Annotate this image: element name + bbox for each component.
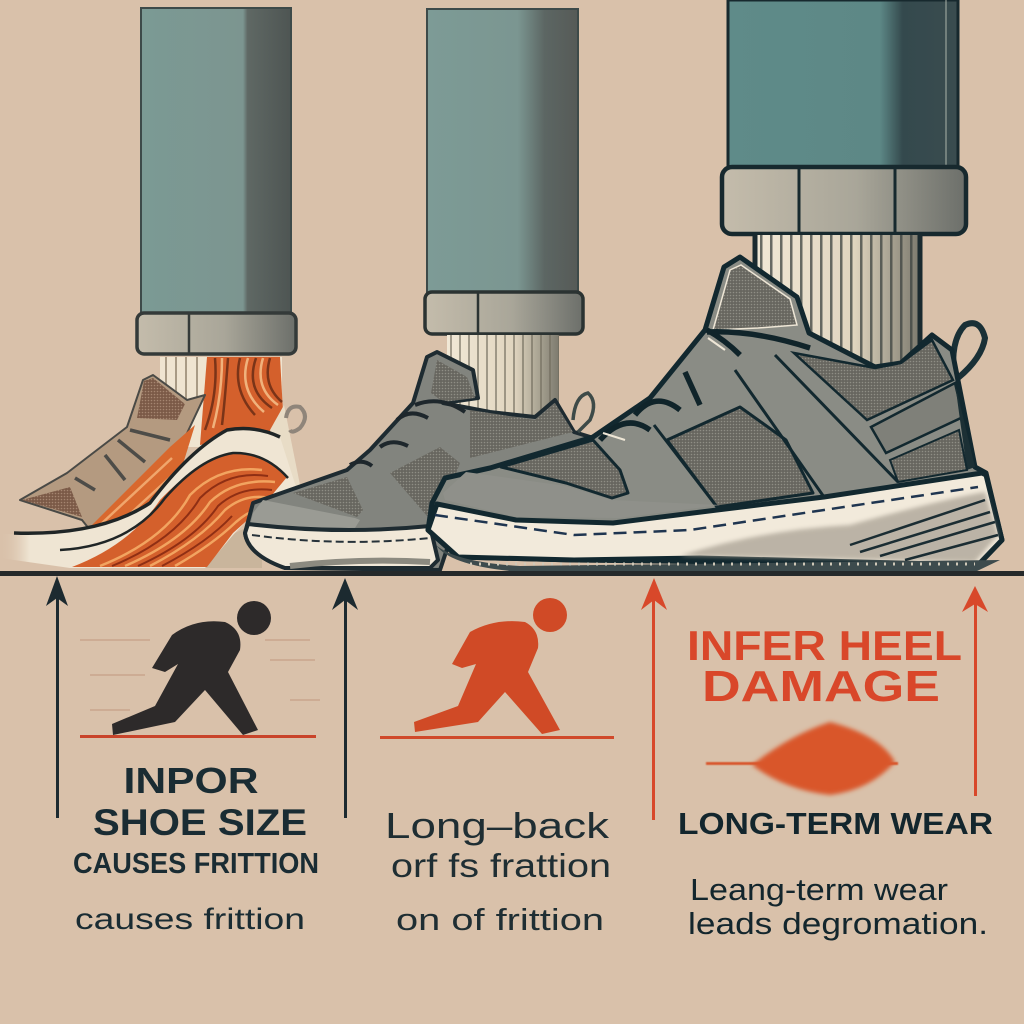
heading: inner heel damage: INFER HEEL [687, 622, 962, 669]
arrow: left inner [332, 578, 358, 818]
laces [600, 330, 810, 440]
text: left column: INPOR [124, 760, 258, 801]
middle mesh [667, 407, 813, 507]
text: right column [678, 806, 993, 941]
text: middle column: Long–back [385, 805, 610, 846]
motion lines [80, 640, 320, 710]
icon: orange running figure [414, 598, 567, 734]
tan ground patch behind sole [205, 520, 262, 568]
toe mesh [501, 440, 628, 498]
heel mesh [890, 430, 967, 482]
ground line [0, 571, 1024, 576]
text: middle column: orf fs frattion [391, 847, 611, 884]
arrow: left outer [46, 576, 68, 818]
arrow: middle right [641, 578, 667, 820]
shoe upper [20, 375, 205, 530]
white swoosh bands [0, 429, 297, 568]
left foot: inflamed shoe with friction lines [0, 357, 305, 568]
text: right column: LONG-TERM WEAR [678, 806, 993, 841]
text: left column [73, 760, 319, 936]
heel strip [871, 383, 963, 453]
sock with friction [160, 357, 284, 447]
divider line: orange figure [380, 736, 614, 739]
toe cap [443, 472, 720, 518]
tongue mesh [713, 265, 797, 330]
divider line: dark figure [80, 735, 316, 738]
right shoe [428, 257, 1002, 572]
left leg: trouser and cuff [137, 8, 296, 354]
text: middle column: on of frittion [396, 902, 604, 937]
text: left column: causes frittion [75, 903, 305, 936]
heel pull loop [953, 323, 985, 378]
middle shoe [245, 352, 600, 570]
text: right column: Leang-term wear [690, 872, 948, 907]
icon: heel damage blot [706, 722, 898, 795]
text: right column: leads degromation. [688, 906, 988, 941]
right leg: trouser and cuff [722, 0, 966, 370]
text: middle column [385, 805, 611, 937]
sole shading [680, 492, 998, 562]
icon: dark running figure [112, 601, 271, 735]
upper silhouette [428, 257, 1002, 565]
text: left column: SHOE SIZE [93, 802, 307, 843]
heading: inner heel damage [687, 622, 962, 711]
collar mesh [794, 340, 953, 420]
heel with loop [270, 405, 300, 495]
tread [436, 545, 1000, 572]
arrow: far right [962, 586, 988, 796]
text: left column: CAUSES FRITTION [73, 848, 319, 880]
heading: inner heel damage: DAMAGE [702, 662, 940, 711]
diagonal strap lines [654, 355, 898, 507]
sole [428, 473, 1002, 565]
middle leg: trouser and cuff [425, 9, 583, 425]
orange swirl field [72, 453, 287, 567]
